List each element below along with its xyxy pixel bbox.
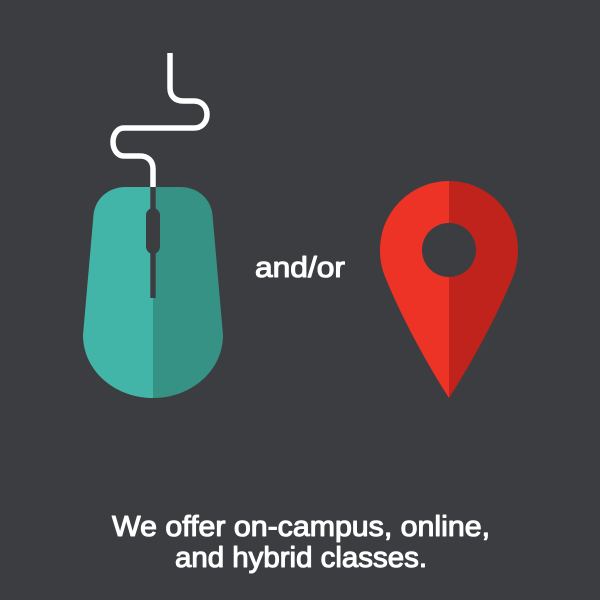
caption: We offer on-campus, online, xyxy=(112,511,490,543)
mouse scroll slot xyxy=(146,187,160,298)
mouse body right half xyxy=(153,187,223,398)
caption: and hybrid classes. xyxy=(175,542,427,574)
pin hole xyxy=(422,223,476,277)
caption xyxy=(112,511,490,574)
pin right half xyxy=(449,181,518,398)
connector text: and/or xyxy=(255,252,345,284)
pin left half xyxy=(380,181,449,398)
mouse cable xyxy=(113,53,207,187)
icon: computer mouse xyxy=(83,53,223,398)
mouse body left half xyxy=(83,187,153,398)
icon: map pin xyxy=(380,181,518,398)
